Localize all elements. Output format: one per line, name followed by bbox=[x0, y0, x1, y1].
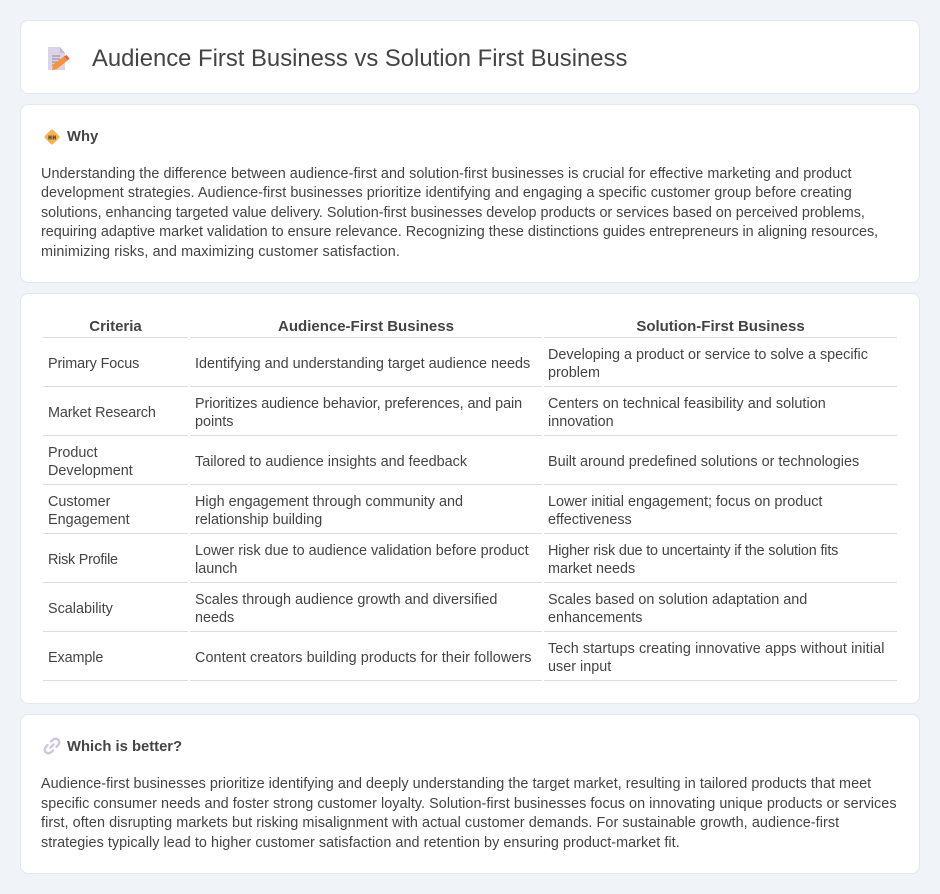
row: example: user input bbox=[548, 659, 611, 675]
row: example: Content creators building products for their followers bbox=[195, 650, 532, 666]
heading: which is better: Which is better? bbox=[67, 739, 182, 755]
text block: why explanation: requiring adaptive market validation to ensure relevance. Recognizing these distinctions guides entrepreneurs in aligning resources, bbox=[41, 224, 878, 240]
row: risk profile: market needs bbox=[548, 561, 635, 577]
row: primary focus: Identifying and understanding target audience needs bbox=[195, 356, 530, 372]
row: primary focus: Developing a product or service to solve a specific bbox=[548, 347, 868, 363]
text block: which is better explanation: specific consumer needs and foster strong customer loyalty. Solution-first businesses focus on innovating unique products or services bbox=[41, 796, 897, 812]
panel: title card bbox=[20, 20, 920, 94]
row: example bbox=[43, 641, 897, 681]
text block: why explanation: Understanding the difference between audience-first and solution-first businesses is crucial for effective marketing and product bbox=[41, 166, 852, 182]
row: scalability: enhancements bbox=[548, 610, 642, 626]
icon: document with pencil bbox=[48, 47, 70, 70]
row: example: Example bbox=[48, 650, 103, 666]
row: scalability: Scalability bbox=[48, 601, 113, 617]
row: market research: Centers on technical feasibility and solution bbox=[548, 396, 826, 412]
title: Audience First Business vs Solution First Business bbox=[92, 45, 627, 72]
table header: Audience-First Business bbox=[278, 318, 454, 335]
row: scalability bbox=[43, 592, 897, 632]
row: scalability: Scales through audience growth and diversified bbox=[195, 592, 497, 608]
row: risk profile: Risk Profile bbox=[48, 552, 118, 568]
row: primary focus: Primary Focus bbox=[48, 356, 139, 372]
text block: why explanation: development strategies. Audience-first businesses prioritize identifying and engaging a specific customer group before creating bbox=[41, 185, 852, 201]
row: risk profile: Lower risk due to audience validation before product bbox=[195, 543, 529, 559]
row: risk profile: launch bbox=[195, 561, 237, 577]
table header: Solution-First Business bbox=[636, 318, 805, 335]
text block: why explanation: solutions, enhancing targeted value delivery. Solution-first businesses develop products or services based on perceived problems, bbox=[41, 205, 865, 221]
row: risk profile: Higher risk due to uncertainty if the solution fits bbox=[548, 543, 838, 559]
row: primary focus: problem bbox=[548, 365, 600, 381]
row: market research: innovation bbox=[548, 414, 614, 430]
icon: chain link bbox=[44, 738, 60, 754]
row: product development bbox=[43, 445, 897, 485]
row: customer engagement: effectiveness bbox=[548, 512, 632, 528]
panel: which is better bbox=[20, 714, 920, 874]
row: example: Tech startups creating innovative apps without initial bbox=[548, 641, 885, 657]
row: scalability: Scales based on solution adaptation and bbox=[548, 592, 807, 608]
row: market research: points bbox=[195, 414, 233, 430]
table header bbox=[43, 318, 897, 338]
panel: comparison table bbox=[20, 293, 920, 704]
text block: why explanation: minimizing risks, and maximizing customer satisfaction. bbox=[41, 244, 400, 260]
text block: which is better explanation: Audience-first businesses prioritize identifying and deeply understanding the target market, resulting in tailored products that meet bbox=[41, 776, 871, 792]
row: customer engagement: Customer bbox=[48, 494, 110, 510]
row: customer engagement: High engagement through community and bbox=[195, 494, 463, 510]
row: customer engagement bbox=[43, 494, 897, 534]
panel: why bbox=[20, 104, 920, 283]
text block: which is better explanation: strategies typically lead to higher customer satisfaction and retention by ensuring product-market fit. bbox=[41, 834, 680, 850]
row: customer engagement: relationship building bbox=[195, 512, 322, 528]
row: customer engagement: Lower initial engagement; focus on product bbox=[548, 494, 822, 510]
row: risk profile bbox=[43, 543, 897, 583]
row: product development: Product bbox=[48, 445, 98, 461]
icon: warning diamond bbox=[44, 130, 60, 144]
row: scalability: needs bbox=[195, 610, 234, 626]
text block: which is better explanation bbox=[41, 776, 897, 850]
row: product development: Development bbox=[48, 463, 133, 479]
heading: why: Why bbox=[67, 129, 98, 145]
row: market research bbox=[43, 396, 897, 436]
row: market research: Market Research bbox=[48, 405, 156, 421]
row: market research: Prioritizes audience behavior, preferences, and pain bbox=[195, 396, 522, 412]
row: product development: Built around predefined solutions or technologies bbox=[548, 454, 859, 470]
row: product development: Tailored to audience insights and feedback bbox=[195, 454, 467, 470]
text block: which is better explanation: first, often disrupting markets but risking misalignment with actual customer demands. For sustainable growth, audience-first bbox=[41, 815, 839, 831]
row: customer engagement: Engagement bbox=[48, 512, 130, 528]
text block: why explanation bbox=[41, 166, 878, 260]
table header: Criteria bbox=[89, 318, 142, 335]
row: primary focus bbox=[43, 347, 897, 387]
